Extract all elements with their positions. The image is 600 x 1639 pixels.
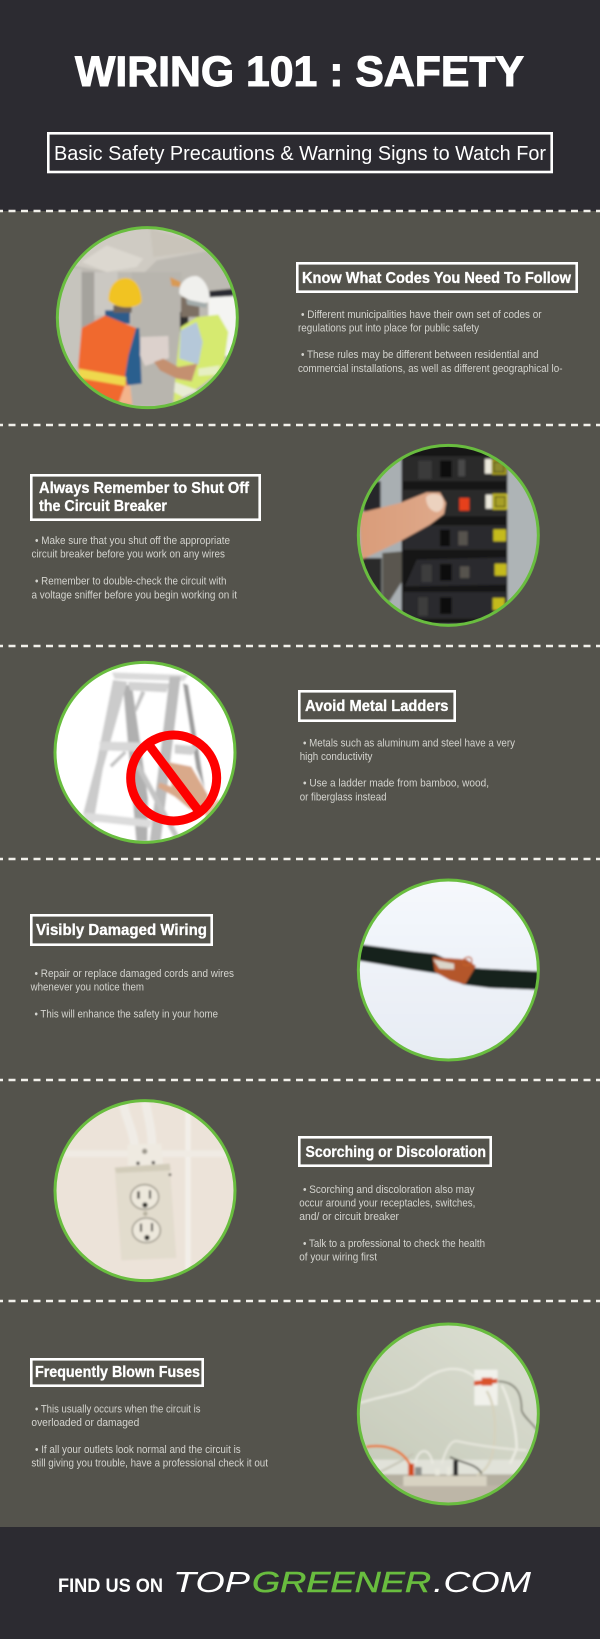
body text: circuit breaker before you work on any wires — [32, 549, 225, 561]
body text: commercial installations, as well as different geographical lo- — [298, 363, 563, 375]
body text: a voltage sniffer before you begin working on it — [32, 589, 237, 601]
heading — [299, 1137, 491, 1166]
heading — [31, 915, 212, 945]
heading: Scorching or Discoloration — [306, 1144, 486, 1161]
panel: metal ladders — [54, 660, 515, 844]
heading: Avoid Metal Ladders — [305, 698, 448, 715]
heading — [31, 1359, 203, 1386]
heading — [299, 691, 455, 721]
logo: topgreener.com: TOP — [173, 1567, 250, 1599]
body text — [32, 535, 237, 601]
body text: • Scorching and discoloration also may — [303, 1184, 475, 1196]
photo: two construction workers — [56, 226, 239, 410]
panel: footer — [0, 1527, 600, 1639]
logo: topgreener.com — [173, 1567, 531, 1599]
panel: know what codes — [56, 226, 578, 410]
find us on label: FIND US ON — [58, 1575, 163, 1597]
subtitle box — [48, 133, 552, 172]
body text: occur around your receptacles, switches, — [299, 1198, 475, 1210]
body text: whenever you notice them — [30, 982, 144, 994]
panel: damaged wiring — [30, 878, 540, 1062]
panel: header — [0, 0, 600, 211]
body text: • Remember to double-check the circuit with — [35, 576, 226, 588]
body text: • Talk to a professional to check the health — [303, 1238, 485, 1250]
body text: still giving you trouble, have a professional check it out — [31, 1458, 268, 1470]
body text: regulations put into place for public safety — [298, 322, 479, 334]
heading: Frequently Blown Fuses — [35, 1364, 200, 1381]
heading: Know What Codes You Need To Follow — [302, 270, 572, 287]
body text: or fiberglass instead — [300, 791, 386, 803]
body text: • This usually occurs when the circuit is — [35, 1403, 201, 1415]
panel: blown fuses — [30, 1322, 540, 1506]
body text — [31, 1403, 268, 1470]
body text: • These rules may be different between residential and — [301, 349, 538, 361]
body text — [299, 1184, 485, 1264]
panel: circuit breaker — [30, 444, 540, 627]
body text: • Repair or replace damaged cords and wires — [34, 968, 234, 980]
body text — [298, 309, 563, 375]
body text: • This will enhance the safety in your home — [34, 1009, 218, 1021]
body text — [300, 737, 515, 803]
body text: • Use a ladder made from bamboo, wood, — [303, 778, 489, 790]
title: WIRING 101 : SAFETY — [75, 48, 524, 96]
body text: overloaded or damaged — [31, 1417, 139, 1429]
body text: • Metals such as aluminum and steel have a very — [303, 737, 515, 749]
photo: finger on circuit breaker — [356, 444, 540, 627]
heading — [297, 263, 577, 292]
heading — [31, 475, 260, 520]
photo: wall outlet — [54, 1099, 236, 1282]
heading: the Circuit Breaker — [39, 498, 167, 515]
body text: of your wiring first — [299, 1252, 377, 1264]
photo: overloaded power strip — [356, 1322, 540, 1506]
body text — [30, 968, 234, 1021]
body text: • Different municipalities have their own set of codes or — [301, 309, 542, 321]
photo: damaged cable — [356, 878, 540, 1062]
logo: topgreener.com: GREENER — [252, 1567, 431, 1599]
body text: and/ or circuit breaker — [299, 1211, 399, 1223]
body text: • Make sure that you shut off the appropriate — [35, 535, 230, 547]
heading: Always Remember to Shut Off — [39, 480, 250, 497]
heading: Visibly Damaged Wiring — [36, 922, 207, 939]
panel: scorching — [54, 1099, 492, 1282]
subtitle box: Basic Safety Precautions & Warning Signs to Watch For — [54, 143, 546, 165]
photo: ladder with prohibition sign — [54, 660, 236, 844]
logo: topgreener.com: .COM — [433, 1567, 531, 1599]
body text: high conductivity — [300, 751, 373, 763]
body text: • If all your outlets look normal and the circuit is — [35, 1444, 241, 1456]
